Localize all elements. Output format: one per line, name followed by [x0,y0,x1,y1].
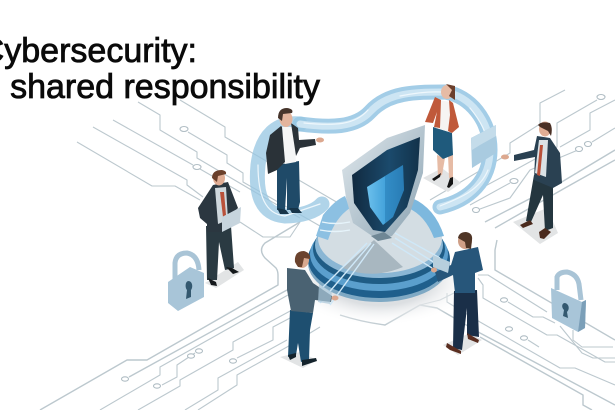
light beams [310,233,440,305]
shield inner panel [352,137,420,232]
person: bottom right, back view [431,232,483,354]
top disc [318,203,442,273]
padlock: right [551,272,586,332]
floor shadows [205,168,558,368]
person: bottom left, back view [287,251,338,366]
central platform [308,196,450,302]
platform floor glow [285,234,475,326]
shield frame [342,125,425,240]
circuit traces: lower right [340,240,615,410]
padlock: left [168,253,204,311]
disc wedge [343,240,403,274]
circuit traces: lower left [40,222,320,410]
back ring walls [316,196,350,240]
person: right with red tie [501,122,562,239]
person: top centre, dark suit [266,108,324,214]
shield core highlight [385,165,404,223]
shield core [367,165,404,225]
shield [342,125,425,241]
shield base [371,232,392,241]
person: left with tablet [198,170,241,286]
data panel [471,125,496,168]
person: woman in orange jacket [425,84,459,188]
circuit nodes [122,94,605,388]
outer ring [308,224,450,302]
title line 2: shared responsibility [10,68,320,106]
ribbon: data flow loop [257,92,490,216]
circuit traces: upper right [420,90,615,305]
title [0,32,320,106]
circuit traces: upper left [77,100,345,237]
